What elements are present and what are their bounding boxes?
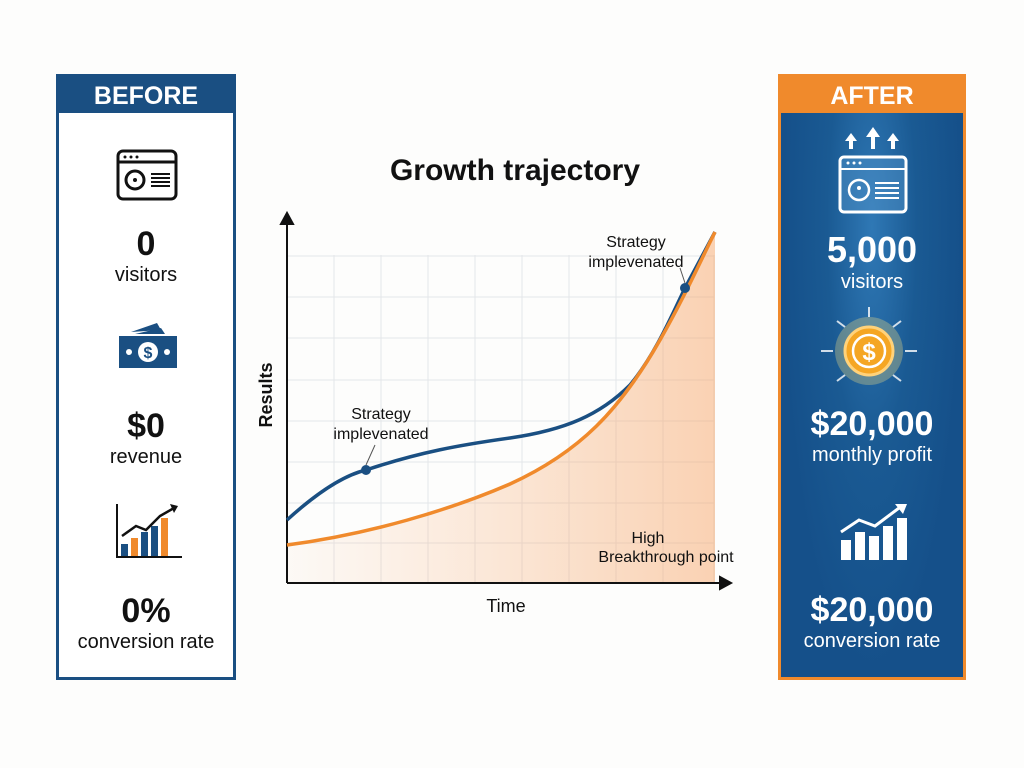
stat: conversion rate: conversion rate (804, 630, 940, 652)
stat: conversion rate: $20,000 (811, 591, 933, 629)
stat: visitors: visitors (841, 271, 903, 293)
heading: before (59, 77, 233, 113)
stat: monthly profit (811, 405, 933, 466)
stat: conversion rate (804, 591, 940, 652)
stat: revenue: revenue (110, 446, 182, 468)
stat: visitors (827, 229, 917, 293)
stat: visitors: 5,000 (827, 229, 917, 270)
chart: growth lines: Breakthrough point (598, 549, 734, 566)
blue line (287, 232, 715, 520)
chart: growth lines: High (632, 530, 664, 547)
chart: growth lines: implevenated (588, 254, 684, 271)
heading: after (781, 77, 963, 113)
stat: conversion: conversion rate (78, 631, 214, 653)
stat: visitors: visitors (115, 264, 177, 286)
heading: before: BEFORE (94, 82, 198, 110)
orange line (287, 232, 715, 545)
stat: visitors: 0 (137, 225, 155, 263)
icon: browser with arrows (838, 127, 908, 214)
stat: conversion: 0% (121, 592, 171, 630)
icon: bar chart (116, 504, 182, 558)
stat: revenue (110, 407, 182, 468)
stat: conversion (78, 592, 214, 653)
stat: revenue: $0 (127, 407, 165, 445)
icon: growth bars (840, 504, 907, 560)
title: Growth trajectory (390, 154, 640, 187)
chart: growth lines: Results (256, 362, 276, 428)
icon: glowing coin: $ (862, 339, 876, 366)
stat: monthly profit: monthly profit (812, 444, 932, 466)
stat: monthly profit: $20,000 (811, 405, 933, 443)
icon: glowing coin (821, 307, 917, 385)
axes (281, 213, 731, 589)
chart: growth lines: Strategy (606, 234, 666, 251)
heading: after: AFTER (830, 82, 914, 110)
icon: money: $ (144, 345, 153, 362)
chart: growth lines: Time (486, 596, 526, 616)
panel: before (56, 74, 236, 680)
stat: visitors (115, 225, 177, 286)
icon: browser (116, 150, 178, 200)
area fill (287, 232, 715, 583)
labels: Strategy (351, 406, 411, 423)
chart: growth lines (256, 211, 734, 616)
panel: after (778, 74, 966, 680)
chart: growth lines: implevenated (333, 426, 429, 443)
icon: money (119, 323, 177, 368)
